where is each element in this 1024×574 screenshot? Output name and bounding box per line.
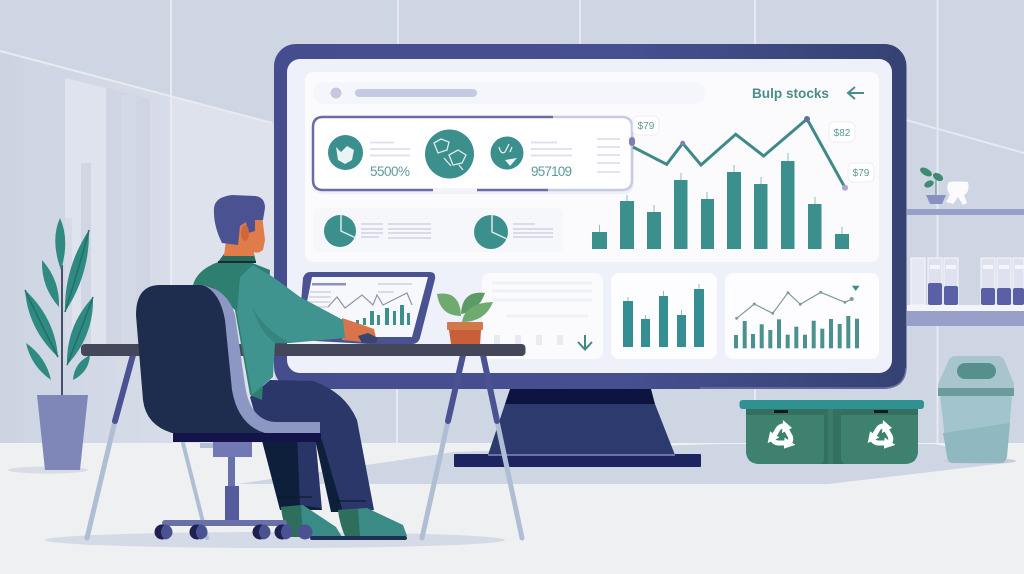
price label 2	[829, 122, 855, 142]
KPI panel	[313, 117, 634, 194]
KPI value left: 5500%	[370, 164, 410, 179]
pie legend 1	[361, 224, 431, 238]
icon: down arrow	[578, 335, 592, 350]
chair seat	[173, 433, 321, 442]
desk plant	[437, 293, 493, 344]
KPI text lines	[370, 142, 572, 156]
chair column	[162, 442, 287, 526]
line chart	[629, 116, 848, 191]
heading: Bulp stocks	[752, 86, 829, 101]
shelf plant	[919, 166, 946, 204]
shelves	[907, 166, 1024, 326]
desk legs	[87, 355, 522, 538]
recycling bins	[740, 400, 924, 464]
monitor stand	[454, 389, 701, 467]
torso	[193, 254, 345, 400]
icon: back arrow	[848, 87, 864, 99]
pie chart 1	[324, 215, 356, 247]
floor	[0, 443, 1024, 574]
KPI list lines	[597, 139, 620, 172]
KPI icon 2	[425, 130, 474, 178]
binders	[911, 258, 1024, 305]
main bar chart	[592, 153, 849, 249]
price label 1: $79	[638, 121, 655, 132]
trash can	[938, 356, 1016, 464]
hands	[342, 318, 378, 343]
wall	[0, 0, 1024, 444]
card: bar chart	[611, 273, 717, 359]
shoes	[281, 505, 407, 540]
legs	[250, 380, 374, 513]
pie panel	[313, 208, 563, 252]
price label 1	[633, 116, 659, 135]
monitor	[274, 44, 906, 389]
laptop	[298, 272, 435, 344]
icon: recycle left	[763, 420, 801, 454]
potted plant left	[25, 218, 93, 470]
desk	[81, 344, 526, 538]
KPI icon 1	[328, 135, 363, 170]
pie chart 2	[474, 215, 508, 249]
price label 3	[848, 163, 874, 182]
shelf ornament	[946, 182, 968, 205]
chair wheels	[154, 524, 312, 540]
chair trim	[203, 285, 320, 433]
card: list	[482, 273, 603, 359]
dashboard top panel	[305, 72, 879, 262]
office chair	[136, 285, 321, 540]
icon: recycle right	[863, 420, 901, 454]
head	[214, 195, 265, 256]
chair back	[136, 285, 272, 433]
price label 2: $82	[834, 128, 851, 139]
person	[193, 195, 407, 540]
price label 3: $79	[853, 168, 870, 179]
KPI icon 3	[490, 136, 524, 170]
KPI value right: 957109	[531, 164, 572, 179]
search bar	[313, 82, 705, 104]
pie legend 2	[513, 224, 553, 237]
card: combo chart	[725, 273, 879, 359]
